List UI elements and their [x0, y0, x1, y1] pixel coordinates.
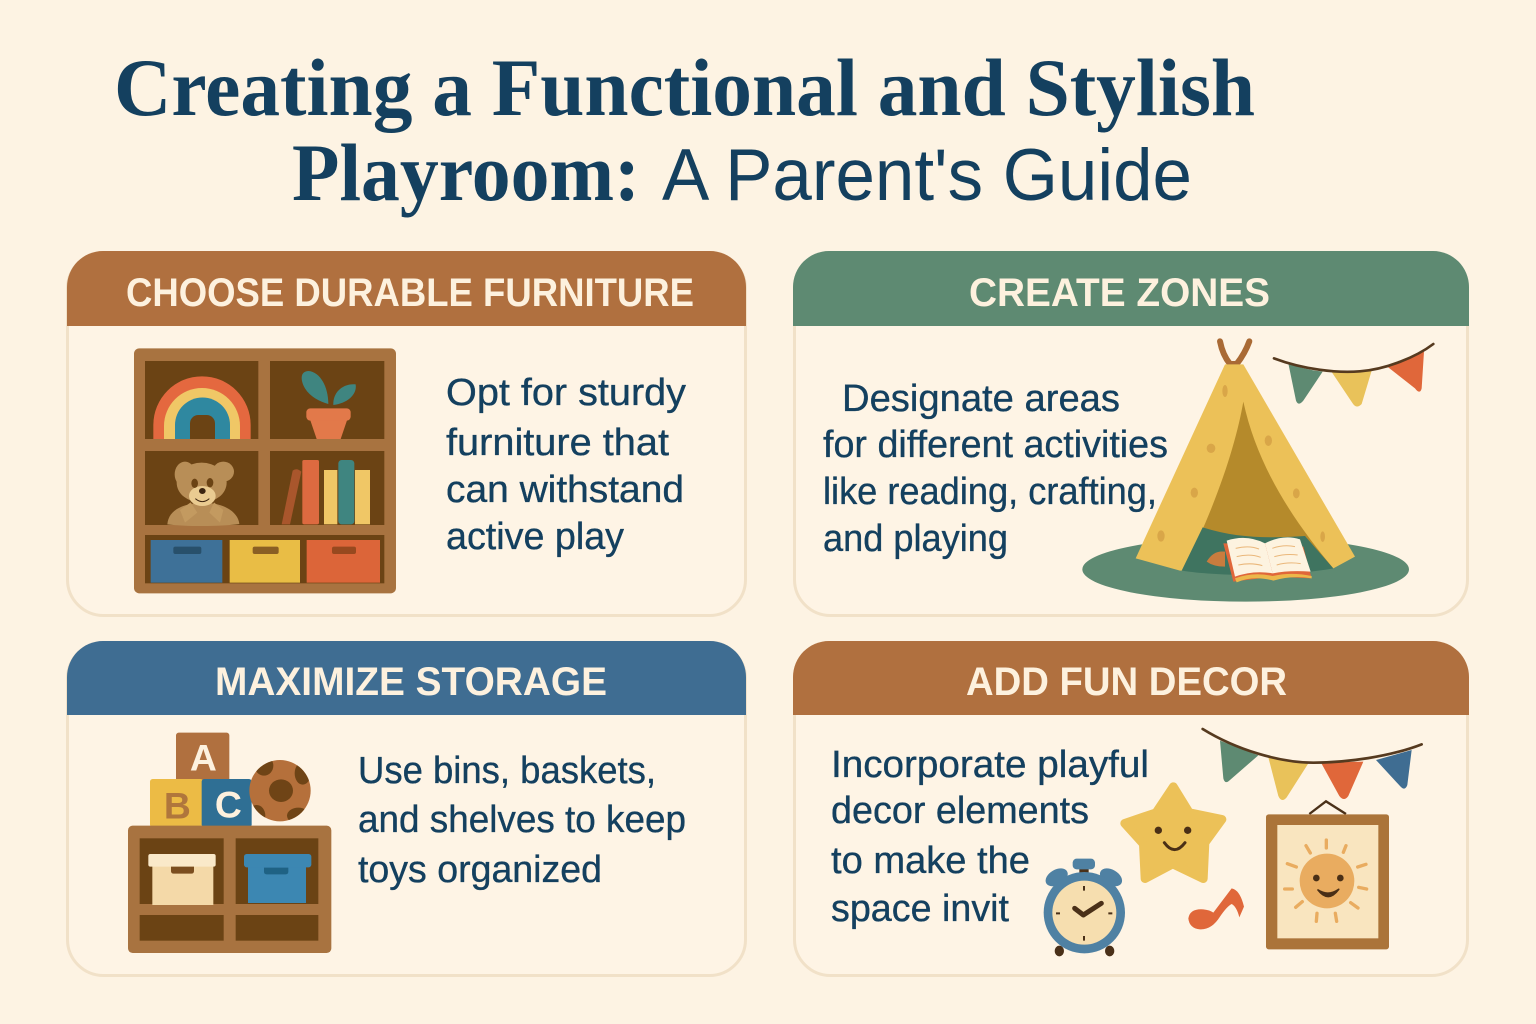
- rainbow: [153, 376, 251, 439]
- title: [114, 42, 1255, 218]
- text: maximize storage: and shelves to keep: [358, 799, 686, 841]
- text: create zones: [823, 378, 1168, 560]
- title: Playroom:: [292, 127, 640, 218]
- header: choose durable furniture: [67, 251, 746, 326]
- open book: [1207, 537, 1312, 582]
- text: choose durable furniture: active play: [446, 516, 624, 558]
- icon: bookshelf with toys: [134, 348, 396, 593]
- teddy bear: [167, 462, 239, 526]
- text: add fun decor: Incorporate playful: [831, 744, 1149, 786]
- letter blocks: B: [164, 784, 191, 826]
- smiling star: [1125, 787, 1222, 879]
- music note: [1188, 888, 1244, 929]
- bunting: [1274, 344, 1433, 407]
- text: choose durable furniture: furniture that: [446, 422, 669, 464]
- text: maximize storage: toys organized: [358, 849, 602, 891]
- header: add fun decor: [793, 641, 1469, 715]
- text: create zones: Designate areas: [842, 378, 1120, 420]
- text: maximize storage: [358, 750, 686, 891]
- potted plant: [302, 371, 356, 439]
- panel: choose durable furniture: [67, 251, 746, 616]
- header: maximize storage: MAXIMIZE STORAGE: [215, 660, 607, 704]
- title: Creating a Functional and Stylish: [114, 42, 1255, 133]
- text: create zones: for different activities: [823, 424, 1168, 466]
- shelf: [128, 826, 331, 953]
- text: add fun decor: space invit: [831, 888, 1009, 930]
- header: create zones: CREATE ZONES: [969, 271, 1270, 315]
- storage bins: [151, 540, 380, 583]
- text: maximize storage: Use bins, baskets,: [358, 750, 656, 792]
- text: add fun decor: decor elements: [831, 790, 1089, 832]
- cream box: [148, 854, 216, 905]
- text: choose durable furniture: can withstand: [446, 469, 684, 511]
- icon: teepee tent on rug: [1082, 341, 1433, 602]
- blue box: [244, 854, 311, 903]
- text: add fun decor: [831, 744, 1149, 930]
- letter blocks: A: [190, 736, 217, 778]
- books: [282, 460, 370, 524]
- text: choose durable furniture: [446, 372, 686, 558]
- alarm clock: [1042, 859, 1125, 956]
- text: choose durable furniture: Opt for sturdy: [446, 372, 686, 414]
- panel: create zones: [793, 251, 1469, 616]
- title: A Parent's Guide: [662, 135, 1192, 216]
- header: add fun decor: ADD FUN DECOR: [966, 660, 1287, 704]
- letter blocks: C: [215, 783, 242, 825]
- header: create zones: [793, 251, 1469, 326]
- ball: [249, 760, 311, 822]
- text: create zones: like reading, crafting,: [823, 471, 1157, 513]
- panel: add fun decor: [793, 641, 1469, 976]
- panel: maximize storage: [67, 641, 746, 976]
- icon: decor illustrations: [1042, 729, 1422, 956]
- header: choose durable furniture: CHOOSE DURABLE FURNITURE: [126, 271, 694, 315]
- header: maximize storage: [67, 641, 746, 715]
- letter blocks: [150, 733, 252, 827]
- text: create zones: and playing: [823, 518, 1008, 560]
- bunting: [1203, 729, 1422, 800]
- text: add fun decor: to make the: [831, 840, 1030, 882]
- icon: blocks, ball and storage shelf: [128, 733, 331, 953]
- framed sun picture: [1266, 801, 1389, 949]
